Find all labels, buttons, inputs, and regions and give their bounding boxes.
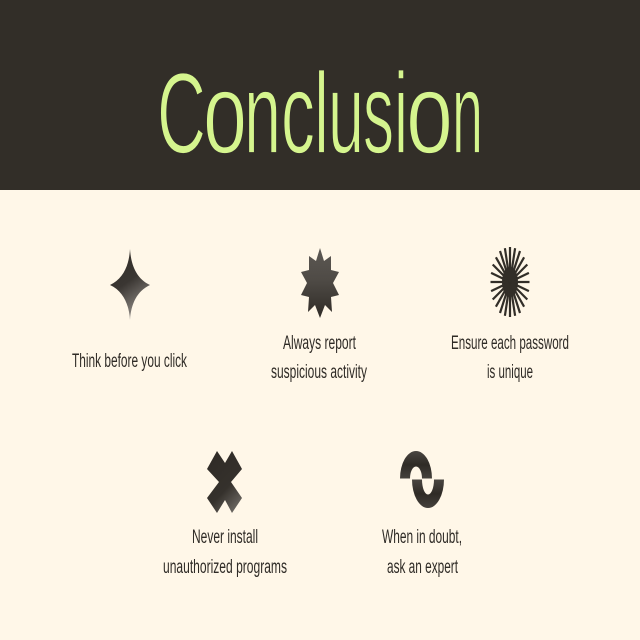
icon: ten-point star bbox=[301, 248, 339, 318]
title: n bbox=[244, 50, 281, 178]
tip: never install unauthorized programs bbox=[163, 451, 287, 578]
label: always report suspicious activity bbox=[271, 333, 367, 383]
label: ensure each password is unique: Ensure each password bbox=[451, 333, 569, 354]
icon: sunburst bbox=[490, 247, 530, 317]
title bbox=[157, 50, 483, 178]
tip: ask an expert bbox=[382, 451, 462, 578]
tip: report suspicious activity bbox=[271, 248, 367, 383]
title: l bbox=[314, 50, 329, 178]
header band bbox=[0, 0, 640, 190]
label: never install unauthorized programs: Never install bbox=[192, 527, 258, 548]
label: never install unauthorized programs bbox=[163, 527, 287, 578]
title: C bbox=[157, 50, 206, 178]
title: i bbox=[394, 50, 408, 178]
label: ensure each password is unique: is unique bbox=[487, 362, 533, 383]
icon: x shape bbox=[207, 451, 242, 513]
icon: wave arcs bbox=[400, 451, 444, 508]
label: ensure each password is unique bbox=[451, 333, 569, 383]
title: u bbox=[328, 50, 364, 178]
label: when in doubt, ask an expert: ask an expert bbox=[387, 557, 458, 578]
label: when in doubt, ask an expert bbox=[382, 527, 462, 578]
title: c bbox=[281, 50, 315, 178]
tip: think before you click bbox=[72, 249, 187, 372]
panel: tips bbox=[72, 247, 569, 578]
text: n bbox=[452, 50, 483, 178]
label: always report suspicious activity: suspicious activity bbox=[271, 362, 367, 383]
label: never install unauthorized programs: unauthorized programs bbox=[163, 557, 287, 578]
icon: four-point star bbox=[110, 249, 150, 320]
label: think before you click: Think before you click bbox=[72, 351, 187, 372]
tip: unique password bbox=[451, 247, 569, 383]
title: s bbox=[363, 50, 394, 178]
label: always report suspicious activity: Always report bbox=[283, 333, 356, 354]
title: o bbox=[203, 50, 247, 178]
label: when in doubt, ask an expert: When in doubt, bbox=[382, 527, 462, 548]
title: o bbox=[406, 50, 453, 178]
